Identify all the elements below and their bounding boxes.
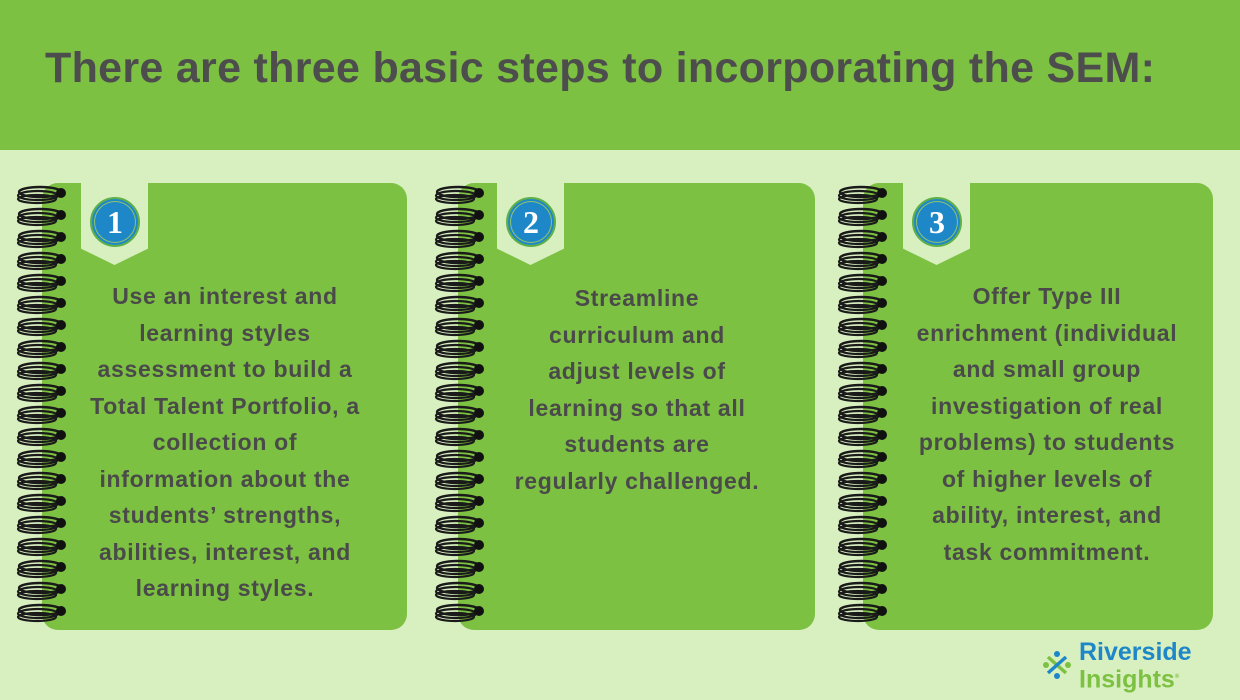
panel: step 1 [42, 183, 407, 630]
spiral binding 1 [16, 186, 66, 622]
text step 3: problems) to students [919, 429, 1175, 455]
text step 3: of higher levels of [942, 466, 1152, 492]
text step 3: Offer Type III [973, 283, 1121, 309]
text step 1: Use an interest and [112, 283, 338, 309]
text step 3: ability, interest, and [932, 502, 1162, 528]
logo text: Riverside [1079, 638, 1192, 666]
spiral binding 3 [838, 186, 887, 622]
text step 1: information about the [99, 466, 351, 492]
ribbon 2 [497, 183, 564, 265]
badge 1: 1 [107, 204, 123, 240]
text step 2: curriculum and [549, 322, 725, 348]
text step 3 [917, 283, 1177, 564]
text step 1 [90, 283, 360, 601]
badge 3: 3 [929, 204, 945, 240]
text step 1: students’ strengths, [109, 502, 341, 528]
text step 3: investigation of real [931, 392, 1163, 418]
badge 2 [506, 197, 556, 247]
text step 2: adjust levels of [548, 358, 726, 384]
text step 1: assessment to build a [98, 356, 352, 382]
icon: logo figure [1043, 651, 1071, 679]
badge 2: 2 [523, 204, 539, 240]
text step 2: regularly challenged. [515, 468, 759, 494]
text step 1: learning styles. [136, 575, 314, 601]
title: There are three basic steps to incorporating the SEM: [45, 44, 1155, 92]
header band [0, 0, 1240, 150]
panel: step 2 [458, 183, 815, 630]
text step 1: abilities, interest, and [99, 538, 351, 564]
logo [1043, 638, 1192, 693]
logo text [1079, 638, 1192, 693]
text step 2 [515, 285, 759, 494]
text step 2: students are [564, 431, 710, 457]
text step 3: enrichment (individual [917, 320, 1177, 346]
ribbon 3 [903, 183, 970, 265]
badge 3 [912, 197, 962, 247]
ribbon 1 [81, 183, 148, 265]
text step 1: learning styles [139, 320, 311, 346]
text step 3: and small group [953, 356, 1141, 382]
text step 2: learning so that all [528, 394, 746, 420]
badge 1 [90, 197, 140, 247]
spiral binding 2 [434, 186, 484, 622]
text step 1: collection of [153, 429, 297, 455]
text step 2: Streamline [575, 285, 699, 311]
text step 1: Total Talent Portfolio, a [90, 392, 360, 418]
panel: step 3 [863, 183, 1213, 630]
logo text: Insights® [1079, 665, 1179, 693]
text step 3: task commitment. [944, 538, 1150, 564]
